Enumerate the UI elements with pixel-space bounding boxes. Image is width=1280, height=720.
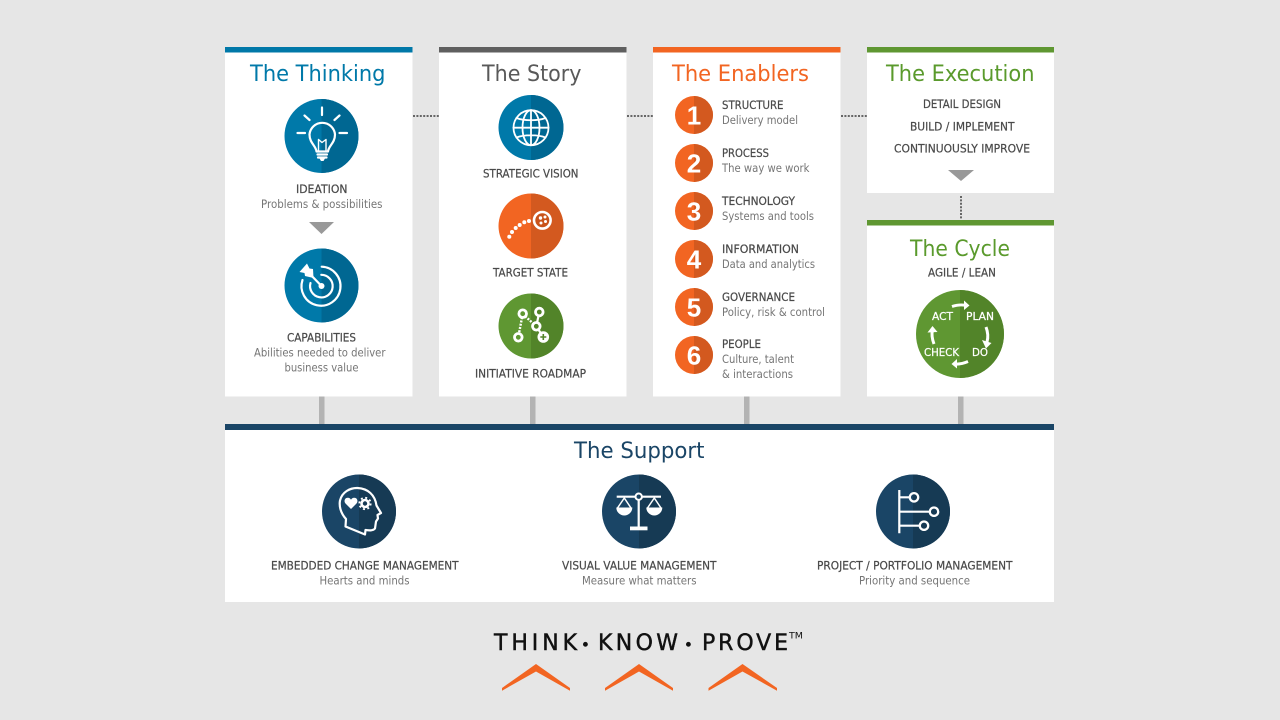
icon: roadmap xyxy=(498,294,564,358)
heading: The Story: The Story xyxy=(481,61,582,87)
connector: execution to cycle xyxy=(960,196,962,219)
text: project portfolio management: PROJECT / PORTFOLIO MANAGEMENT xyxy=(817,558,1013,572)
text: capabilities xyxy=(254,330,386,374)
text: visual value management xyxy=(562,558,717,588)
icon: target state xyxy=(498,194,564,258)
cycle diagram: PLAN xyxy=(966,310,994,323)
heading: The Support: The Support xyxy=(573,438,705,464)
arrow: down xyxy=(309,222,334,234)
panel: The Support xyxy=(225,424,1054,602)
icon: light bulb xyxy=(284,99,358,173)
tagline: think know prove: • xyxy=(581,636,590,654)
tagline: think know prove: TM xyxy=(788,632,803,642)
tagline: think know prove: • xyxy=(684,636,693,654)
heading: The Execution: The Execution xyxy=(885,61,1034,87)
execution steps xyxy=(894,97,1030,156)
panel: The Enablers xyxy=(653,47,840,396)
connector: enablers to execution xyxy=(841,115,867,117)
enabler 2: PROCESS xyxy=(722,146,769,160)
cycle diagram: ACT xyxy=(932,310,953,323)
enabler 6: PEOPLE xyxy=(722,337,761,351)
enabler 3: 3 xyxy=(687,196,701,226)
tagline: think know prove: THINK xyxy=(493,631,578,656)
text: ideation xyxy=(261,182,382,211)
enabler 2: 2 xyxy=(687,148,701,178)
text: embedded change management: Hearts and minds xyxy=(320,574,410,588)
enabler 1 xyxy=(675,96,798,134)
text: embedded change management xyxy=(271,558,459,588)
enabler 3: TECHNOLOGY xyxy=(721,194,796,208)
execution steps: DETAIL DESIGN xyxy=(923,97,1001,111)
enabler 5: 5 xyxy=(687,292,701,322)
connector: thinking to story xyxy=(413,115,439,117)
enabler 6: & interactions xyxy=(722,367,793,381)
execution steps: BUILD / IMPLEMENT xyxy=(910,120,1015,134)
tagline: think know prove: KNOW xyxy=(598,631,678,656)
heading: The Thinking: The Thinking xyxy=(249,61,386,87)
icon: globe xyxy=(498,95,564,160)
enabler 5: Policy, risk & control xyxy=(722,305,825,319)
chevrons xyxy=(502,664,777,691)
label: initiative roadmap: INITIATIVE ROADMAP xyxy=(475,366,586,380)
cycle diagram: CHECK xyxy=(924,346,960,359)
icon: head xyxy=(322,474,396,548)
text: capabilities: CAPABILITIES xyxy=(287,330,356,344)
enabler 6: Culture, talent xyxy=(722,352,794,366)
text: visual value management: Measure what matters xyxy=(582,574,697,588)
panel: The Cycle xyxy=(867,220,1054,396)
tagline: think know prove: PROVE xyxy=(702,631,788,656)
enabler 6 xyxy=(675,336,794,381)
text: capabilities: Abilities needed to deliver xyxy=(254,346,386,360)
icon: scales xyxy=(602,474,676,548)
heading: The Cycle: The Cycle xyxy=(909,236,1010,262)
arrow: down xyxy=(948,170,974,181)
label: strategic vision: STRATEGIC VISION xyxy=(483,166,578,180)
text: ideation: IDEATION xyxy=(296,182,348,196)
text: ideation: Problems & possibilities xyxy=(261,197,382,211)
panel: The Execution xyxy=(867,47,1054,193)
text: embedded change management: EMBEDDED CHANGE MANAGEMENT xyxy=(271,558,459,572)
enabler 4: Data and analytics xyxy=(722,257,815,271)
enabler 1: 1 xyxy=(687,100,701,130)
execution steps: CONTINUOUSLY IMPROVE xyxy=(894,142,1030,156)
connector: story to enablers xyxy=(627,115,653,117)
icon: project tree xyxy=(876,474,950,548)
enabler 4 xyxy=(675,240,815,278)
cycle diagram: DO xyxy=(972,346,988,359)
enabler 5 xyxy=(675,288,825,326)
subheading: agile lean: AGILE / LEAN xyxy=(928,266,996,280)
enabler 4: 4 xyxy=(687,244,702,274)
enabler 1: Delivery model xyxy=(722,113,798,127)
enabler 3: Systems and tools xyxy=(722,209,814,223)
enabler 3 xyxy=(675,192,814,230)
connector posts to support xyxy=(319,396,964,424)
enabler 1: STRUCTURE xyxy=(722,98,784,112)
heading: The Enablers: The Enablers xyxy=(671,61,809,87)
text: project portfolio management xyxy=(817,558,1013,588)
panel: The Story xyxy=(439,47,626,396)
text: visual value management: VISUAL VALUE MANAGEMENT xyxy=(562,558,717,572)
enabler 2 xyxy=(675,144,810,182)
enabler 2: The way we work xyxy=(721,161,810,175)
label: target state: TARGET STATE xyxy=(492,266,568,280)
icon: target xyxy=(284,248,358,322)
tagline: think know prove xyxy=(493,631,803,656)
enabler 5: GOVERNANCE xyxy=(722,290,795,304)
panel: The Thinking xyxy=(225,47,412,396)
text: project portfolio management: Priority and sequence xyxy=(859,574,970,588)
text: capabilities: business value xyxy=(284,360,358,374)
cycle diagram xyxy=(916,290,1004,378)
enabler 4: INFORMATION xyxy=(722,242,799,256)
enabler 6: 6 xyxy=(687,340,701,370)
